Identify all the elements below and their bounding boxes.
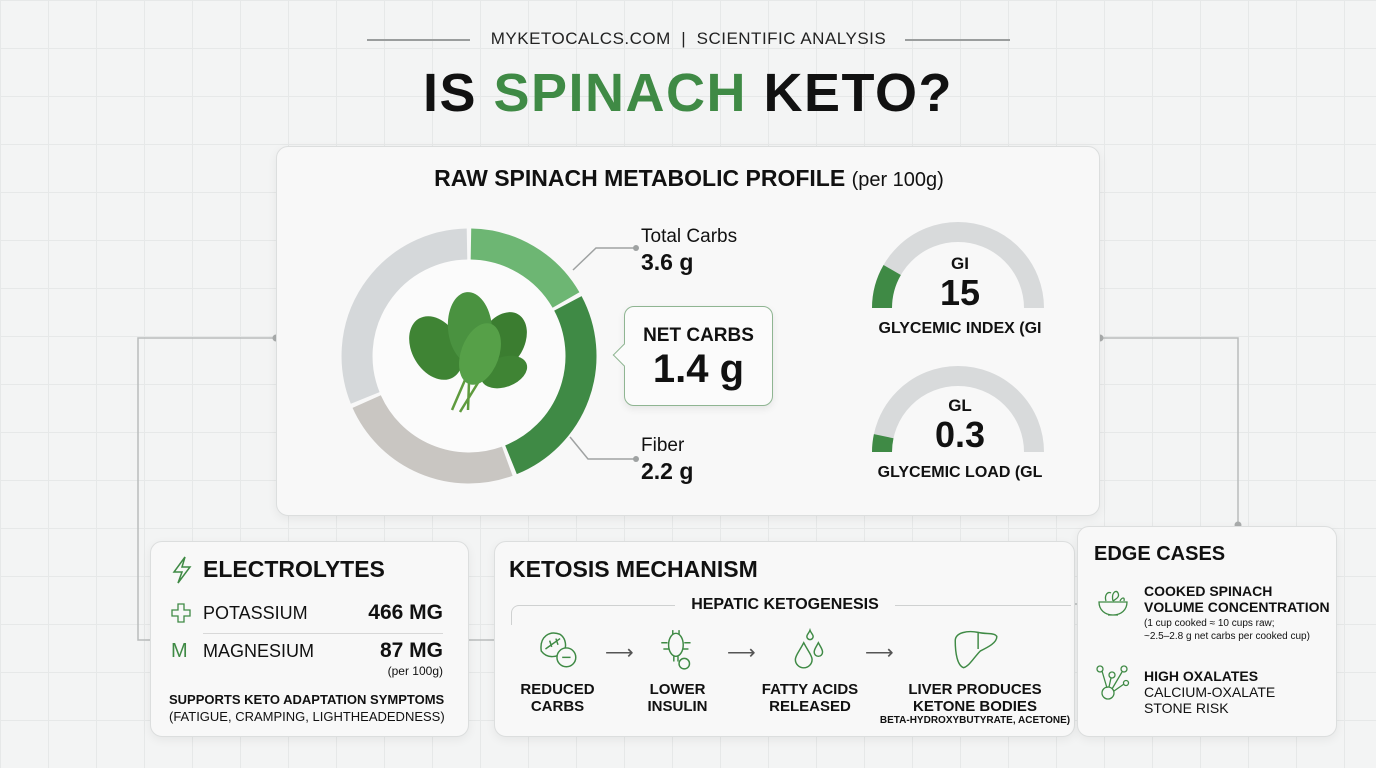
- row: magnesium: (per 100g): [388, 664, 443, 678]
- text: supports keto adaptation: SUPPORTS KETO ADAPTATION SYMPTOMS: [169, 692, 444, 707]
- callout: net carbs: [624, 306, 773, 406]
- label: fiber: [570, 435, 693, 484]
- gauge: glycemic index: GLYCEMIC INDEX (GI: [878, 320, 1041, 337]
- item: high oxalates: [1144, 668, 1275, 716]
- panel: ketosis mechanism: ⟶: [605, 642, 634, 664]
- heading: edge cases: EDGE CASES: [1094, 543, 1225, 565]
- step: liver produces ketone bodies: LIVER PRODUCES: [908, 681, 1042, 698]
- gauge: glycemic index: [872, 222, 1044, 337]
- step: reduced carbs: [520, 632, 595, 715]
- gauge: glycemic load: GLYCEMIC LOAD (GL: [878, 464, 1042, 481]
- step: lower insulin: LOWER: [650, 681, 705, 698]
- row: potassium: POTASSIUM: [203, 603, 308, 623]
- step: liver produces ketone bodies: BETA-HYDROXYBUTYRATE, ACETONE): [880, 715, 1070, 726]
- item: high oxalates: CALCIUM-OXALATE: [1144, 684, 1275, 700]
- gauge: glycemic load: 0.3: [935, 414, 985, 455]
- item: cooked spinach: VOLUME CONCENTRATION: [1144, 599, 1330, 615]
- item: cooked spinach: (1 cup cooked ≈ 10 cups raw;: [1144, 618, 1275, 629]
- item: cooked spinach: COOKED SPINACH: [1144, 583, 1272, 599]
- row: magnesium: [171, 639, 443, 678]
- row: potassium: [171, 601, 443, 624]
- panel heading: RAW SPINACH METABOLIC PROFILE (per 100g): [434, 165, 944, 191]
- item: cooked spinach: [1144, 583, 1330, 642]
- icon: oxalate molecule: [1096, 665, 1130, 700]
- panel: edge cases: [1077, 526, 1337, 737]
- panel: ketosis mechanism: ⟶: [727, 642, 756, 664]
- subheading: hepatic ketogenesis: HEPATIC KETOGENESIS: [691, 596, 879, 613]
- icon: lightning: [172, 556, 192, 584]
- gauge: glycemic load: [872, 366, 1044, 481]
- heading: ketosis mechanism: KETOSIS MECHANISM: [509, 556, 758, 582]
- row: magnesium: M: [171, 640, 188, 662]
- gauge: glycemic index: 15: [940, 272, 980, 313]
- gauge: glycemic index: GI: [951, 254, 969, 273]
- step: reduced carbs: REDUCED: [520, 681, 595, 698]
- panel: metabolic profile: [276, 146, 1100, 516]
- item: high oxalates: HIGH OXALATES: [1144, 668, 1258, 684]
- label: fiber: Fiber: [641, 435, 684, 456]
- gauge: glycemic load: GL: [948, 396, 972, 415]
- icon: spinach leaves: [398, 290, 537, 412]
- panel: ketosis mechanism: CARBS: [531, 698, 584, 715]
- label: total carbs: 3.6 g: [641, 249, 693, 275]
- text: supports keto adaptation: [169, 692, 445, 724]
- step: fatty acids released: FATTY ACIDS: [762, 681, 858, 698]
- callout: net carbs: 1.4 g: [653, 347, 744, 391]
- step: lower insulin: [648, 630, 708, 715]
- step: liver produces ketone bodies: KETONE BODIES: [913, 698, 1037, 715]
- text: supports keto adaptation: (FATIGUE, CRAMPING, LIGHTHEADEDNESS): [169, 709, 445, 724]
- donut chart: [342, 228, 596, 484]
- item: high oxalates: STONE RISK: [1144, 700, 1229, 716]
- label: total carbs: [572, 226, 737, 275]
- item: cooked spinach: ~2.5–2.8 g net carbs per cooked cup): [1144, 631, 1310, 642]
- panel: ketosis mechanism: RELEASED: [769, 698, 851, 715]
- panel: electrolytes: [150, 541, 469, 737]
- row: magnesium: 87 MG: [380, 639, 443, 662]
- callout: net carbs: NET CARBS: [643, 325, 754, 346]
- heading: electrolytes: ELECTROLYTES: [203, 556, 385, 582]
- title: IS SPINACH KETO?: [423, 63, 953, 123]
- panel: ketosis mechanism: ⟶: [865, 642, 894, 664]
- row: potassium: 466 MG: [368, 601, 443, 624]
- panel: ketosis mechanism: [494, 541, 1075, 737]
- step: liver produces ketone bodies: [880, 630, 1070, 726]
- icon: bowl: [1098, 590, 1128, 616]
- panel: ketosis mechanism: INSULIN: [648, 698, 708, 715]
- label: total carbs: Total Carbs: [641, 226, 737, 247]
- row: magnesium: MAGNESIUM: [203, 641, 314, 661]
- header subtitle: MYKETOCALCS.COM | SCIENTIFIC ANALYSIS: [491, 29, 886, 48]
- step: fatty acids released: [762, 628, 858, 715]
- label: fiber: 2.2 g: [641, 458, 693, 484]
